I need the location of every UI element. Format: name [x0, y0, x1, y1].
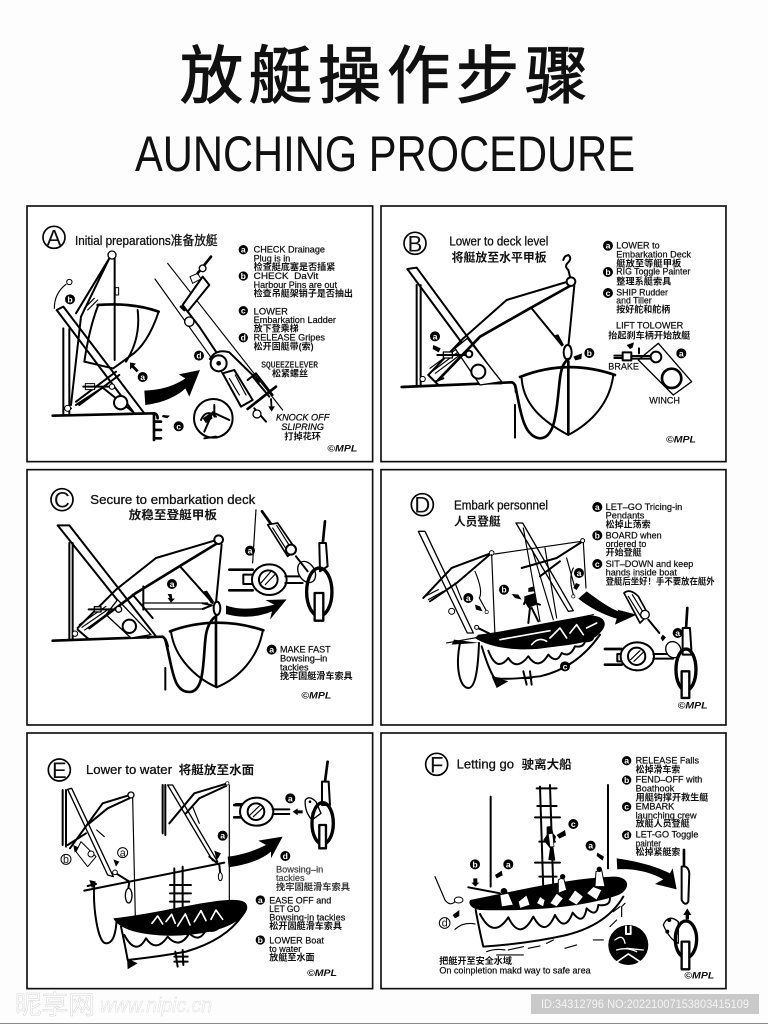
closing note F: On coinpletion makd way to safe area — [439, 965, 591, 975]
instructions C: MAKE FAST — [280, 644, 331, 654]
instructions B — [603, 241, 691, 406]
instructions E: a — [258, 895, 263, 905]
closing note F: 把艇开至安全水域 — [439, 955, 512, 966]
heading B — [449, 234, 548, 265]
callouts in diagram F: d — [442, 918, 448, 930]
callouts in diagram A — [65, 294, 204, 431]
watermark: site logo: 昵享网 — [15, 985, 95, 1022]
instructions E: 挽牢固艇滑车索具 — [276, 881, 350, 892]
callouts in diagram C: a — [170, 579, 175, 589]
instructions D: LET–GO Tricing-in — [606, 502, 682, 512]
callouts in diagram E: b — [63, 854, 69, 866]
instructions F: EMBARK — [636, 801, 675, 811]
instructions E: tackies — [276, 873, 305, 883]
panel: D embark personnel — [381, 470, 726, 725]
watermark: site logo — [15, 985, 212, 1022]
instructions F: 用艇钩撑开救生艇 — [636, 791, 708, 802]
callouts in diagram E: a — [120, 847, 126, 859]
instructions A — [239, 245, 353, 441]
heading B: 将艇放至水平甲板 — [452, 251, 547, 265]
heading F: 驶离大船 — [522, 757, 572, 771]
badge E — [48, 758, 70, 783]
instructions A: SQUEEZELEVER — [261, 361, 318, 371]
callouts in diagram B: a — [679, 348, 684, 358]
callouts in diagram F: c — [571, 819, 576, 829]
instructions B: b — [605, 267, 611, 277]
instructions A: 松开固艇带(索) — [254, 340, 314, 351]
instructions D: 开始登艇 — [606, 547, 642, 558]
instructions C: Bowsing–in — [280, 654, 327, 664]
copyright F: ©MPL — [684, 970, 715, 980]
instructions A: 放下登乘梯 — [254, 323, 299, 334]
instructions A: LOWER — [254, 306, 288, 316]
callouts in diagram E: a — [288, 793, 293, 803]
instructions D: a — [595, 502, 600, 512]
panel: B lower to deck level — [381, 206, 726, 462]
heading F — [457, 756, 572, 771]
badge B: B — [408, 231, 422, 256]
instructions A: 打掉花环 — [284, 430, 321, 441]
instructions F: launching crew — [636, 810, 697, 820]
heading D — [454, 498, 548, 529]
instructions A: a — [241, 245, 246, 255]
callouts in diagram F: a — [506, 859, 511, 869]
instructions A: 检查艇底塞是否插紧 — [254, 261, 335, 272]
callouts in diagram D: c — [563, 661, 568, 671]
instructions D: b — [595, 530, 600, 540]
instructions B: 抬起刹车柄开始放艇 — [608, 330, 690, 341]
instructions D: c — [595, 559, 600, 569]
instructions A: Harbour Pins are out — [254, 280, 337, 290]
instructions A: 松紧螺丝 — [272, 367, 308, 378]
callouts in diagram E — [61, 793, 295, 866]
heading F: Letting go — [457, 756, 514, 771]
badge C: C — [54, 488, 70, 513]
heading E: 将艇放至水面 — [179, 763, 255, 777]
instructions B: and Tiller — [616, 296, 652, 306]
instructions C — [267, 644, 353, 681]
instructions F: LET-GO Toggle — [636, 830, 698, 840]
callouts in diagram A: b — [67, 294, 73, 304]
instructions F: 放艇人员登艇 — [636, 818, 690, 829]
instructions D — [592, 502, 715, 586]
instructions A: RELEASE Gripes — [254, 333, 325, 343]
callouts in diagram C — [167, 546, 255, 589]
callouts in diagram E: d — [283, 851, 288, 861]
callouts in diagram D: a — [577, 568, 582, 578]
callouts in diagram B: a — [433, 331, 438, 341]
instructions D: BOARD when — [606, 530, 662, 540]
instructions B: c — [606, 288, 611, 298]
illustration: boat at embarkation deck with person — [418, 523, 696, 698]
instructions B: SHIP Rudder — [616, 287, 668, 297]
callouts in diagram D: a — [675, 628, 680, 638]
instructions A: b — [241, 271, 246, 281]
instructions E: 放艇至水面 — [269, 952, 315, 963]
panel frame D — [381, 470, 726, 725]
copyright B: ©MPL — [666, 434, 696, 444]
panel: A initial preparations — [27, 206, 373, 462]
instructions B: WINCH — [649, 396, 680, 406]
instructions E — [256, 864, 350, 963]
badge D: D — [414, 493, 430, 518]
instructions B: Embarkation Deck — [616, 250, 691, 260]
callouts in diagram C: a — [248, 546, 253, 556]
instructions A: d — [241, 333, 246, 343]
badge E: E — [52, 758, 67, 783]
title: Chinese: 放艇操作步骤 — [180, 26, 588, 117]
instructions D: 登艇后坐好！手不要放在艇外 — [606, 575, 715, 586]
instructions A: KNOCK OFF — [276, 413, 331, 423]
callouts in diagram D: b — [501, 585, 507, 595]
heading D: 人员登艇 — [454, 515, 501, 529]
instructions F: Boathook — [636, 784, 675, 794]
instructions B: RIG Toggle Painter — [616, 267, 690, 277]
instructions A: c — [241, 306, 246, 316]
instructions F: painter — [636, 838, 661, 848]
instructions C: a — [269, 645, 274, 655]
instructions F: RELEASE Falls — [636, 755, 699, 765]
instructions A: SLIPRING — [281, 422, 324, 432]
closing note F — [439, 955, 591, 975]
panel: E lower to water — [27, 733, 373, 989]
callouts in diagram A: c — [176, 421, 181, 431]
copyright A: ©MPL — [327, 444, 358, 454]
panel frame F — [381, 733, 726, 989]
instructions B: 整理系艇索具 — [616, 275, 671, 286]
callouts in diagram F: a — [588, 841, 593, 851]
instructions B: 艇放至等艇甲板 — [616, 257, 681, 268]
heading E — [86, 762, 255, 777]
instructions A: Embarkation Ladder — [254, 315, 336, 325]
illustration: boat lowered with ladder — [63, 762, 333, 969]
instructions C: 挽牢固艇滑车索具 — [280, 670, 353, 681]
instructions E: b — [258, 935, 263, 945]
instructions B: a — [606, 241, 611, 251]
callouts in diagram B — [430, 331, 686, 358]
heading A: Initial preparations准备放艇 — [75, 233, 218, 248]
badge F: F — [430, 752, 443, 777]
callouts in diagram E: a — [220, 831, 225, 841]
instructions F: d — [624, 830, 629, 840]
instructions A: CHECK Drainage — [254, 245, 325, 255]
copyright E: ©MPL — [307, 968, 337, 978]
heading B: Lower to deck level — [449, 234, 548, 249]
illustration: davit, boat, falls — [402, 255, 692, 438]
instructions E: Bowsing-in tackies — [269, 913, 346, 923]
instructions F: 松掉紧艇索 — [636, 846, 680, 857]
callouts in diagram A: a — [140, 372, 145, 382]
instructions B: BRAKE — [608, 361, 639, 371]
instructions E: Bowsing–in — [276, 864, 323, 874]
heading C: Secure to embarkation deck — [90, 492, 256, 507]
callouts in diagram D — [463, 568, 683, 671]
instructions D: hands inside boat — [606, 568, 677, 578]
panel frame E — [27, 733, 373, 989]
instructions E: to water — [269, 944, 301, 954]
instructions E: EASE OFF and — [269, 895, 331, 905]
callouts in diagram F: b — [472, 859, 478, 869]
instructions A: 检查吊艇架销子是否抽出 — [254, 288, 353, 299]
badge A: A — [47, 225, 62, 250]
instructions F: 松掉滑车索 — [636, 763, 680, 774]
badge A — [43, 225, 65, 250]
copyright D: ©MPL — [678, 701, 708, 711]
panel frame C — [27, 470, 373, 725]
instructions F: a — [624, 756, 629, 766]
instructions E: LOWER Boat — [269, 935, 324, 945]
instructions A: Plug is in — [254, 253, 290, 263]
copyright C: ©MPL — [301, 691, 332, 701]
illustration: davit, tackle, boat — [53, 510, 332, 692]
illustration: davit and boat — [53, 251, 283, 440]
badge B — [404, 231, 426, 256]
instructions B: LIFT TOLOWER — [616, 321, 684, 331]
heading C — [90, 492, 256, 522]
instructions D: ordered to — [606, 539, 646, 549]
panel frame A — [27, 206, 373, 462]
instructions E: 松开固艇滑车索具 — [269, 920, 342, 931]
title: English: AUNCHING PROCEDURE — [135, 126, 635, 182]
instructions F: FEND–OFF with — [636, 775, 702, 785]
panel frame B — [381, 206, 726, 462]
instructions F: b — [624, 775, 629, 785]
instructions D: Pendants — [606, 511, 645, 521]
watermark: image ID box: ID:34312796 NO:20221007153803415109 — [541, 997, 749, 1011]
badge F — [426, 752, 448, 777]
instructions E: LET GO — [269, 904, 300, 914]
heading E: Lower to water — [86, 762, 173, 777]
instructions F — [622, 755, 708, 857]
instructions F: c — [624, 802, 629, 812]
callouts in diagram A: d — [196, 351, 202, 361]
instructions D: 松掉止荡索 — [606, 518, 651, 529]
panel: C secure to embarkation deck — [27, 470, 373, 725]
instructions C: tackies — [280, 662, 309, 672]
illustration: boat afloat with crew — [435, 785, 697, 970]
instructions D: SIT–DOWN and keep — [606, 559, 693, 569]
callouts in diagram D: a — [466, 593, 471, 603]
instructions B: LOWER to — [616, 241, 660, 251]
callouts in diagram B: b — [587, 348, 592, 358]
heading C: 放稳至登艇甲板 — [129, 508, 217, 522]
panel: F letting go — [381, 733, 726, 989]
watermark: image ID box — [531, 994, 759, 1014]
instructions A: CHECK DaVit — [254, 271, 319, 281]
instructions B: 按好舵和舵柄 — [616, 303, 670, 314]
heading D: Embark personnel — [454, 498, 548, 513]
watermark: site logo: www.nipic.cn — [100, 995, 212, 1017]
callouts in diagram F — [439, 819, 596, 930]
